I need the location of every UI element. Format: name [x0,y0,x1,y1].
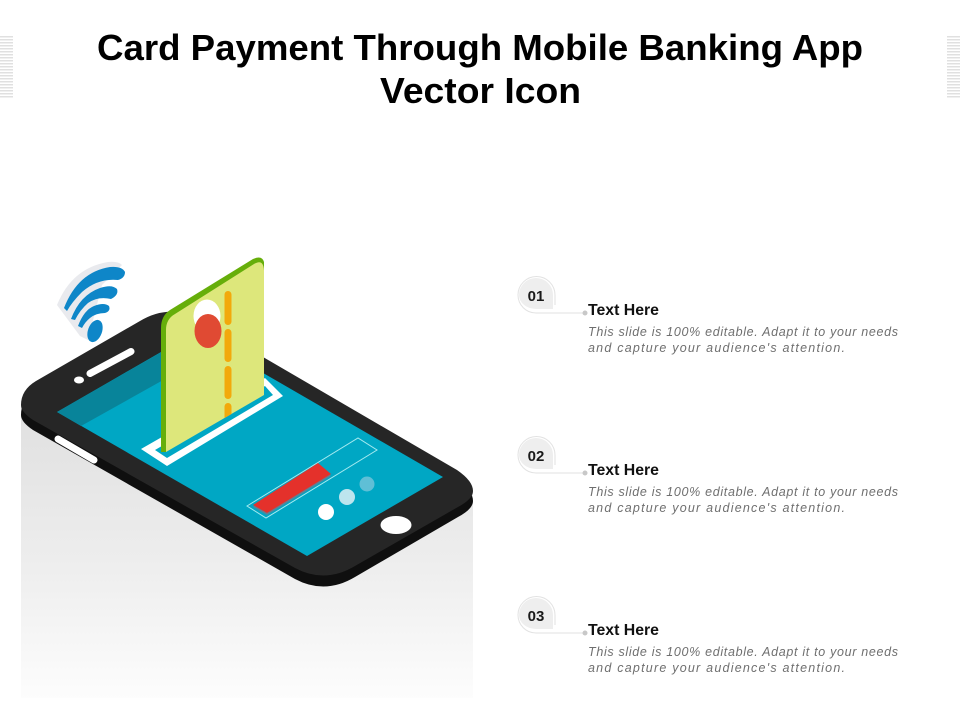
home button [380,516,412,534]
card slot [141,378,283,466]
decorative tab: left [0,36,13,99]
badge [519,438,553,469]
orange stripe [224,291,232,418]
title [97,27,863,111]
progress bar [247,438,377,518]
decorative tab: right [947,36,960,99]
illustration: phone with card [21,258,473,698]
badge [519,278,553,309]
screen shade [57,350,165,426]
item 01 [518,276,898,355]
icon: wifi [57,262,125,344]
title: Card Payment Through Mobile Banking App [97,27,863,68]
phone shadow [21,405,473,698]
body text: This slide is 100% editable. Adapt it to your needs [588,325,898,339]
heading: Text Here [588,302,659,319]
side button [58,439,94,460]
credit card [161,258,264,452]
item 03 [518,596,898,675]
heading: Text Here [588,462,659,479]
item 02 [518,436,898,515]
speaker [90,352,131,374]
item 02: 02 [528,448,544,465]
item 03: 03 [528,608,544,625]
card edge [161,258,264,452]
card face [166,262,264,452]
item 03: and capture your audience's attention. [588,661,845,675]
phone edge [21,322,473,587]
item 01: 01 [528,288,544,305]
heading: Text Here [588,622,659,639]
item 02: and capture your audience's attention. [588,501,845,515]
chip: white circle [194,300,220,332]
screen [57,333,443,556]
chip: red circle [194,314,222,348]
wifi shadow [57,262,122,340]
phone body [21,312,473,576]
camera [74,376,84,384]
body text: This slide is 100% editable. Adapt it to your needs [588,485,898,499]
body text: This slide is 100% editable. Adapt it to your needs [588,645,898,659]
dots [318,476,374,520]
item 01: and capture your audience's attention. [588,341,845,355]
title: Vector Icon [380,70,581,111]
badge [519,598,553,629]
